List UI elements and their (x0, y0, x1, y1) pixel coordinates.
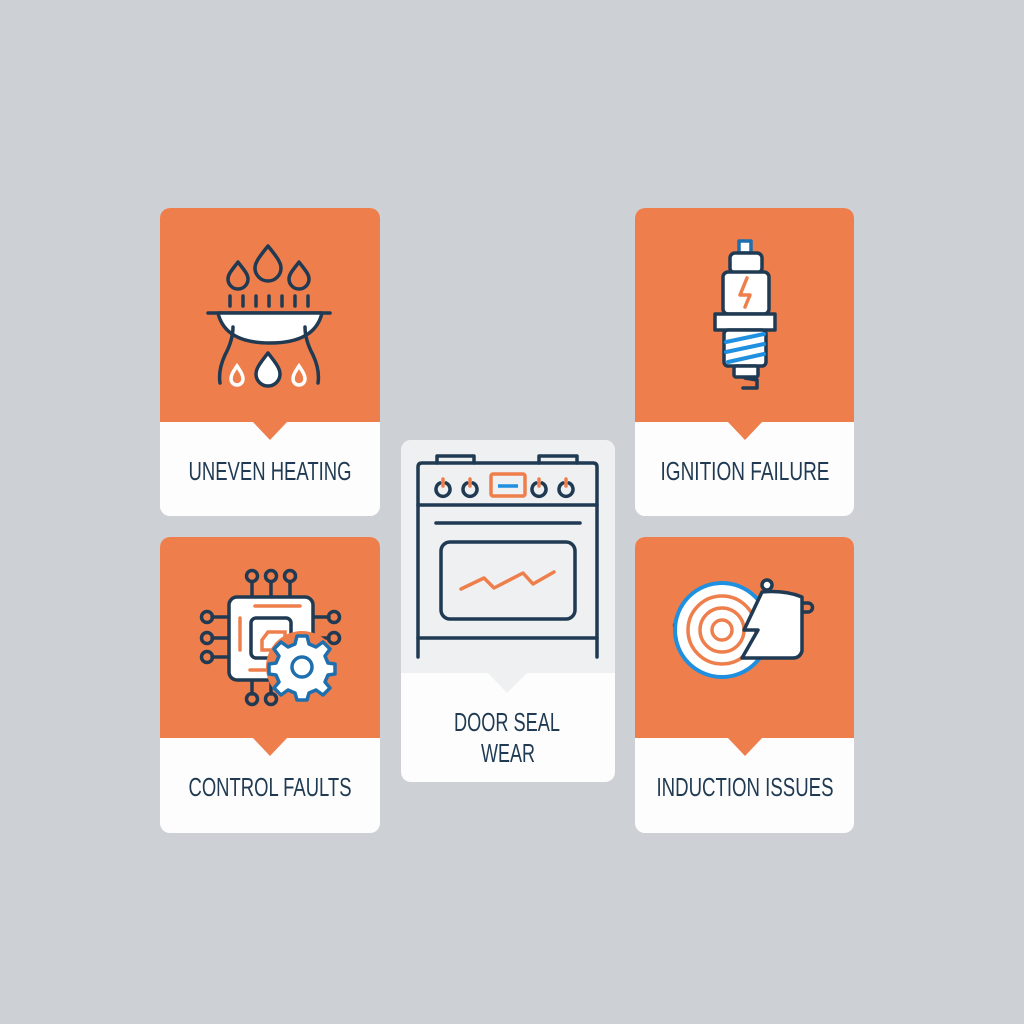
label: ignition failure: IGNITION FAILURE (660, 456, 830, 486)
label: control faults: CONTROL FAULTS (188, 772, 352, 802)
panel: ignition failure (635, 208, 854, 516)
panel: door seal wear: WEAR (481, 738, 535, 768)
icon: grill with flames (208, 246, 330, 386)
icon: induction hob with pot (674, 580, 812, 677)
label: uneven heating: UNEVEN HEATING (188, 456, 352, 486)
panel: door seal wear (401, 440, 615, 782)
panel: uneven heating (160, 208, 380, 516)
icon: circuit chip with gear (202, 570, 340, 704)
panel: induction issues (635, 537, 854, 833)
panel: control faults (160, 537, 380, 833)
icon: spark plug (715, 241, 775, 388)
icon: oven range (418, 456, 597, 657)
label: door seal wear: DOOR SEAL (454, 707, 560, 737)
label: induction issues: INDUCTION ISSUES (656, 772, 834, 802)
